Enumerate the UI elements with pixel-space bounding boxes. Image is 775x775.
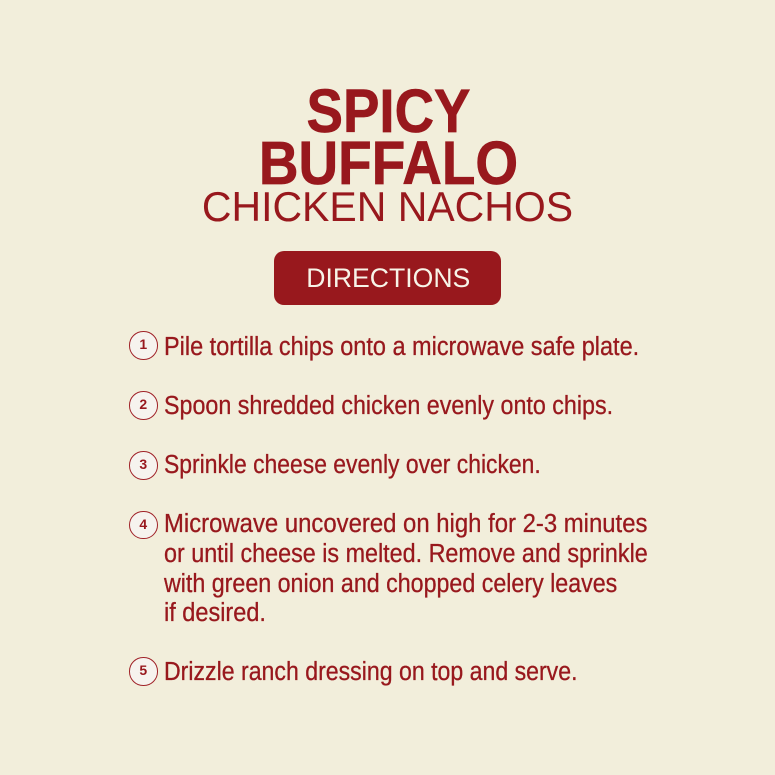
step 2: 2 (139, 396, 147, 412)
step 1: 1 (139, 336, 147, 352)
directions badge: DIRECTIONS (306, 263, 470, 293)
step 1: Pile tortilla chips onto a microwave safe plate. (164, 333, 639, 361)
step 2: Spoon shredded chicken evenly onto chips. (164, 392, 613, 420)
step 4: if desired. (164, 599, 266, 627)
step 4: Microwave uncovered on high for 2-3 minutes (164, 510, 647, 538)
title: BUFFALO (259, 129, 518, 197)
step 4: 4 (139, 516, 147, 532)
directions badge (274, 251, 501, 305)
step 5: 5 (139, 662, 147, 678)
step 4: or until cheese is melted. Remove and sprinkle (164, 540, 648, 568)
title (202, 77, 573, 230)
step 3: Sprinkle cheese evenly over chicken. (164, 451, 541, 479)
step 3: 3 (139, 456, 147, 472)
step 4 (129, 510, 648, 627)
title: SPICY (306, 77, 471, 145)
title: CHICKEN NACHOS (202, 182, 573, 230)
step 5: Drizzle ranch dressing on top and serve. (164, 658, 578, 686)
step 4: with green onion and chopped celery leaves (164, 570, 617, 598)
